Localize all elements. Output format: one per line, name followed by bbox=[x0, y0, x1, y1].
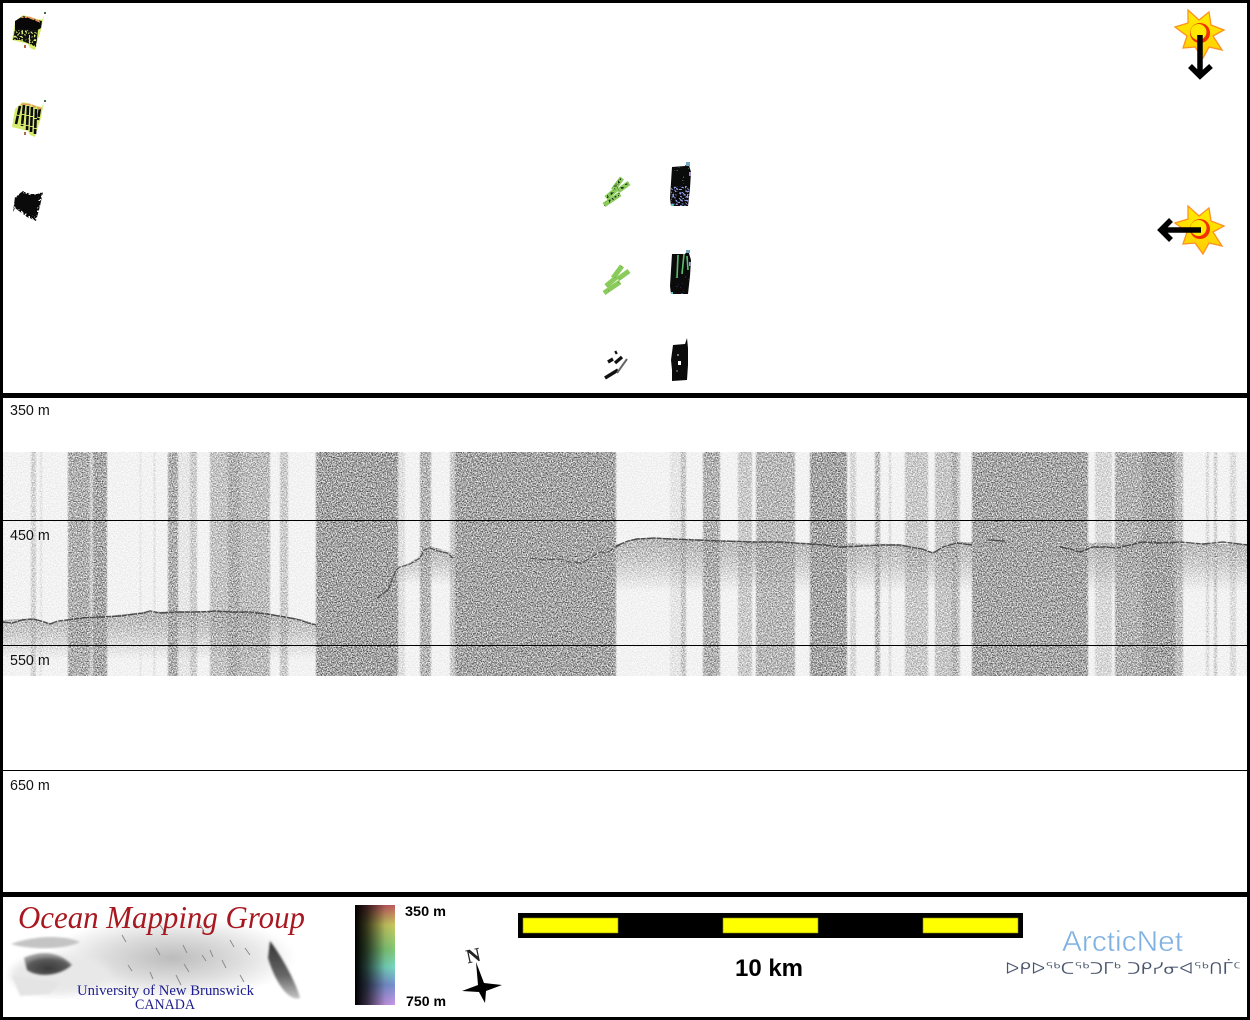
map patch: vertical swath, row 1 bbox=[670, 162, 691, 206]
map patch: diagonal swath, row 2 bbox=[604, 266, 629, 293]
seafloor reflector: middle segments bbox=[377, 548, 453, 598]
map patch: vertical swath, row 3 bbox=[671, 338, 688, 381]
icon: north arrow bbox=[462, 944, 502, 1003]
ArcticNet wordmark: ArcticNet bbox=[1062, 926, 1183, 958]
seafloor reflector: far right segment bbox=[1060, 542, 1248, 552]
logo: ArcticNet bbox=[1005, 926, 1241, 979]
north letter: N bbox=[464, 944, 483, 968]
depth label: 550 m: 550 m bbox=[10, 653, 50, 669]
seafloor reflector: short fragment bbox=[988, 540, 1005, 541]
colour scale bottom label: 750 m bbox=[406, 993, 446, 1009]
depth label: 450 m: 450 m bbox=[10, 528, 50, 544]
Inuktitut syllabics wordmark: ᐅᑭᐅᖅᑕᖅᑐᒥᒃ ᑐᑭᓯᓂᐊᖅᑎᒦᑦ bbox=[1005, 958, 1241, 979]
logo title: Ocean Mapping Group bbox=[18, 899, 305, 935]
depth label: 650 m: 650 m bbox=[10, 778, 50, 794]
logo university name: University of New Brunswick bbox=[77, 983, 254, 999]
map patch: vertical swath, row 2 bbox=[670, 250, 691, 294]
logo: Ocean Mapping Group bbox=[10, 899, 305, 1013]
icon: sun with leftward arrow bbox=[1161, 206, 1224, 254]
map patch: diagonal swath, row 1 bbox=[604, 178, 629, 205]
icon: sun with downward arrow bbox=[1175, 10, 1224, 76]
arrow: down bbox=[1190, 35, 1211, 76]
seafloor reflector: faint segment bbox=[530, 545, 620, 563]
legend: depth colour scale bbox=[355, 905, 395, 1005]
colour scale top label: 350 m bbox=[405, 903, 446, 919]
depth grid lines bbox=[2, 520, 1248, 771]
panel: sonar echogram bbox=[2, 452, 1248, 676]
map patch: left colour swath, row 1 bbox=[12, 12, 46, 50]
seafloor reflector: left segment bbox=[2, 611, 316, 625]
echogram bands and noise bbox=[2, 452, 1248, 676]
depth label: 350 m: 350 m bbox=[10, 403, 50, 419]
scale bar bbox=[518, 913, 1023, 938]
logo country: CANADA bbox=[135, 997, 195, 1013]
scale bar label: 10 km bbox=[735, 955, 803, 982]
logo seabed texture bbox=[10, 916, 300, 1000]
compass star bbox=[462, 962, 502, 1003]
seafloor reflector: right segment bbox=[616, 538, 972, 553]
map patch: left colour swath, row 2 bbox=[12, 100, 46, 137]
map patch: diagonal swath, row 3 bbox=[605, 352, 627, 378]
arrow: left bbox=[1161, 220, 1201, 240]
map patch: left black swath, row 3 bbox=[13, 191, 43, 221]
